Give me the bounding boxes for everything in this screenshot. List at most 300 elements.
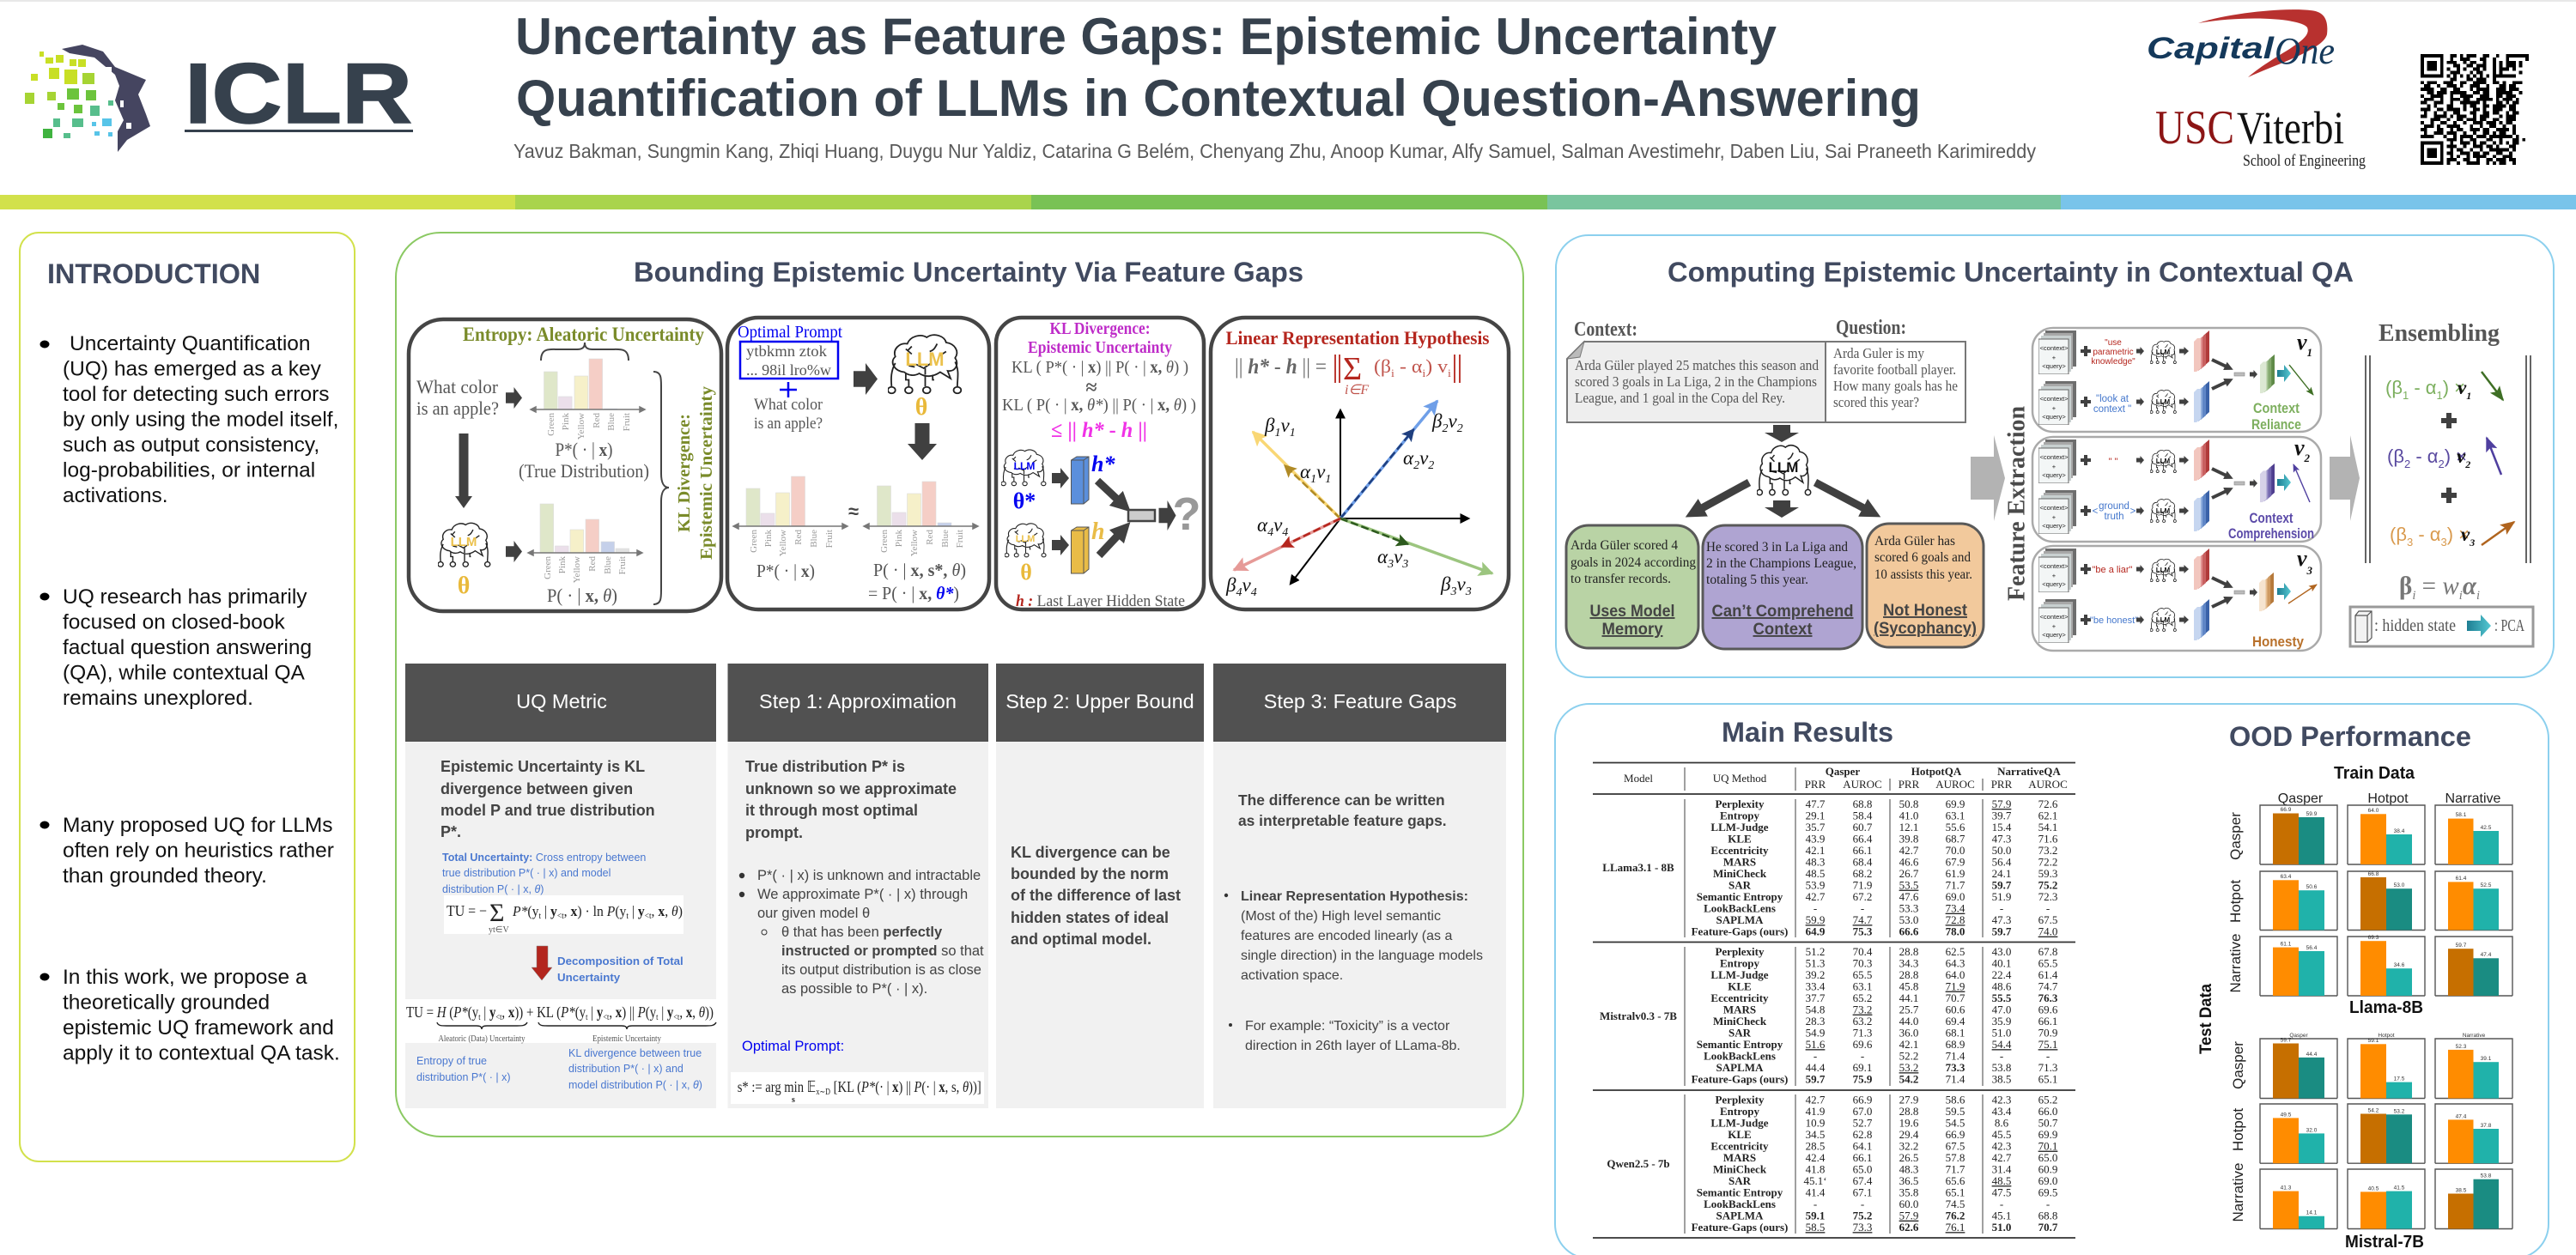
table section: LLama3.1: 35.7: [1806, 821, 1826, 834]
decomposition note: [557, 955, 683, 984]
table section: Qwen: 36.5: [1899, 1174, 1918, 1187]
table section: LLama3.1: KLE: [1728, 833, 1752, 846]
formula: KL: [1002, 358, 1196, 415]
table section: Mistral: 35.9: [1992, 1015, 2011, 1028]
table section: Mistral: SAR: [1728, 1027, 1752, 1040]
formulas: [756, 560, 966, 603]
bar chart: model distribution: Pink: [557, 556, 568, 573]
vector: [2288, 585, 2317, 603]
plus signs: [2081, 564, 2091, 625]
logo: USC Viterbi: Viterbi: [2237, 102, 2344, 154]
question box: favorite football player.: [1833, 361, 1956, 378]
diagram box: entropy and KL divergence: [409, 319, 721, 611]
table section: Qwen: 67.1: [1853, 1186, 1872, 1199]
label: Llama-8B: Llama-8B: [2349, 998, 2423, 1017]
table section: Mistral: 71.3: [2038, 1061, 2057, 1074]
prompt stack 1: <query>: [2042, 580, 2066, 588]
vector labels: v: [1242, 574, 1251, 596]
outcome: uses model memory: to transfer records.: [1571, 572, 1671, 586]
instruction: ground truth: >: [2130, 506, 2136, 517]
table section: Mistral: 71.4: [1946, 1050, 1965, 1063]
bullet 2: (QA), while contextual QA: [63, 661, 306, 685]
formula: total uncertainty: <t: [645, 912, 652, 921]
table section: LLama3.1: SAR: [1728, 879, 1752, 892]
note: entropy: Entropy of true: [416, 1055, 487, 1067]
optimal prompt label: Optimal Prompt:: [742, 1039, 844, 1054]
bar chart: P star: Red: [793, 530, 804, 545]
table header: NarrativeQA: [1997, 765, 2061, 778]
row arrows and brains: LLM: [2156, 616, 2171, 624]
label: v3: 3: [2306, 564, 2313, 577]
bullet: example: direction in 26th layer of LLama-8b.: [1245, 1039, 1461, 1053]
instruction: look at context: "look at: [2096, 394, 2129, 404]
table section: Mistral: 69.6: [1853, 1038, 1873, 1051]
vector labels: β: [1432, 410, 1442, 432]
table section: Mistral: 74.7: [2038, 980, 2058, 993]
column: step 1: [728, 664, 988, 1108]
table section: LLama3.1: 58.4: [1853, 809, 1873, 822]
statement: model P and true distribution: [440, 802, 655, 819]
column labels: mistral: [2289, 1033, 2486, 1039]
total uncertainty note: [442, 852, 646, 895]
question: is an apple?: [416, 397, 499, 419]
prompt stack 2: +: [2052, 622, 2057, 630]
bar chart: model distribution: Red: [587, 556, 598, 572]
vector 4: [1234, 518, 1340, 570]
bar chart: true distribution: Pink: [561, 413, 571, 430]
prompt box: [740, 342, 838, 379]
bar charts: Llama-8B grid: [2260, 805, 2512, 996]
term 2: - α: [2410, 446, 2439, 467]
instruction: ground truth: ground: [2099, 501, 2129, 512]
table section: Qwen: 42.4: [1806, 1151, 1826, 1164]
table section: Mistral: 44.4: [1806, 1061, 1826, 1074]
chart: qasper/hotpot: 64.0: [2368, 808, 2379, 814]
label: test data: Test Data: [2197, 984, 2215, 1054]
label: v1: 1: [2307, 346, 2312, 359]
arrow: [1052, 535, 1069, 555]
formula: decomposition: |: [587, 1003, 597, 1021]
difference arrows: [2212, 578, 2257, 607]
chart: hotpot/qasper: [2260, 1104, 2337, 1163]
formula: decomposition: t: [478, 1013, 481, 1022]
table section: Qwen: 28.8: [1899, 1105, 1918, 1118]
outcome: uses model memory: Arda Güler scored 4: [1571, 538, 1678, 553]
bullet 1: activations.: [63, 484, 168, 507]
block: h star: [1072, 457, 1089, 504]
arrow: PCA: [2277, 474, 2291, 491]
table section: Mistral: KLE: [1728, 980, 1752, 993]
label: Linear Representation Hypothesis: [1226, 327, 1490, 349]
formula: ) v: [1425, 355, 1448, 377]
chart: narrative/narrative: [2435, 937, 2512, 996]
arrow: into LLM: [1765, 425, 1799, 442]
outcome: not honest: Arda Güler has: [1874, 534, 1955, 549]
formula: i: [1391, 367, 1394, 379]
arrow: [1052, 468, 1069, 488]
label: v3: v: [2297, 546, 2307, 571]
term 3: 3: [2407, 536, 2413, 549]
table section: Mistral: 76.3: [2038, 991, 2058, 1004]
formula: true distribution: (True Distribution): [519, 460, 649, 482]
total uncertainty note: true distribution P*( · | x) and model: [442, 867, 611, 879]
chart: qasper/narrative: [2435, 805, 2512, 864]
table section: Mistral: Semantic Entropy: [1697, 1038, 1783, 1051]
title: Quantification of LLMs in Contextual Question-Answering: [516, 70, 1921, 127]
feature frame 3: honesty: [2032, 546, 2321, 651]
statement: it through most optimal: [745, 802, 918, 819]
outcome: uses model memory: Memory: [1602, 621, 1663, 639]
heading: bounding: Bounding Epistemic Uncertainty Via Feature Gaps: [634, 257, 1303, 288]
question box: Arda Guler is my: [1833, 345, 1924, 361]
inequality: ≤ || h* - h ||: [1051, 419, 1147, 442]
table: main results: [1593, 762, 2075, 1238]
prompt stack 2: <context>: [2040, 504, 2069, 512]
formula: total uncertainty: yt∈V: [489, 925, 509, 935]
prompt stack 1: [2038, 330, 2076, 374]
theta star: θ*: [1013, 488, 1036, 513]
bullet: example: [1229, 1019, 1461, 1053]
bar chart: prompted: Red: [925, 530, 935, 545]
prompt stack 1: <query>: [2042, 471, 2066, 479]
table section: Mistral: 68.9: [1946, 1038, 1965, 1051]
note: KL divergence: distribution P*( · | x) and: [568, 1063, 683, 1075]
instruction: look at context: [2093, 394, 2131, 415]
table section: Qwen: MiniCheck: [1713, 1163, 1767, 1176]
arrows to difference: [1097, 481, 1125, 555]
table section: Qwen: Eccentricity: [1710, 1140, 1769, 1153]
table section: LLama3.1: 68.8: [1853, 797, 1872, 810]
icon: head silhouette with pixels: [25, 45, 150, 152]
logo: USC Viterbi: [2155, 101, 2366, 170]
chart: qasper/narrative: 39.1: [2481, 1056, 2492, 1062]
term 1: 1: [2466, 390, 2471, 402]
chart: qasper/hotpot: 38.4: [2394, 828, 2405, 834]
row arrows and brains: LLM: [2156, 507, 2171, 515]
table section: Mistral: 59.7: [1806, 1073, 1826, 1086]
chart: hotpot/narrative: 37.8: [2481, 1123, 2492, 1129]
row labels: mistral: Hotpot: [2230, 1108, 2246, 1151]
formula: true distribution: P*( · | x): [555, 439, 613, 460]
row labels: llama: Qasper: [2227, 812, 2244, 860]
vector labels: β: [1226, 574, 1236, 596]
diagram box: KL bound: [996, 318, 1204, 610]
chart: qasper/narrative: 52.3: [2456, 1044, 2467, 1050]
prompt stack 1: +: [2052, 572, 2057, 579]
formula: total uncertainty: [444, 895, 683, 935]
bullet 3: often rely on heuristics rather: [63, 840, 334, 862]
QR code: [2421, 56, 2529, 163]
bullet: linear representation: activation space.: [1241, 968, 1343, 983]
statement: Epistemic Uncertainty is KL: [440, 758, 645, 775]
vector labels: 2: [1413, 459, 1419, 472]
formula: Σ: [1343, 351, 1362, 387]
arrow: [506, 541, 522, 562]
term 2: 2: [2464, 458, 2470, 470]
formula: beta: i: [2476, 589, 2480, 603]
theta: θ: [915, 394, 927, 421]
instruction: use parametric knowledge: [2091, 338, 2136, 367]
bullet: linear representation: (Most of the) High level semantic: [1241, 909, 1441, 924]
table section: LLama3.1: 53.5: [1899, 879, 1918, 892]
table section: LLama3.1: 74.0: [2038, 925, 2057, 938]
instruction: ground truth: truth: [2104, 512, 2124, 522]
difference box: [1128, 510, 1155, 521]
table section: LLama3.1: 75.2: [2038, 879, 2057, 892]
table section: Qwen: 41.4: [1806, 1186, 1826, 1199]
table section: Qwen: 41.9: [1806, 1105, 1825, 1118]
vector labels: v: [1448, 410, 1457, 432]
table section: Mistral: 51.6: [1806, 1038, 1826, 1051]
table section: Qwen: Entropy: [1720, 1105, 1759, 1118]
label: optimal prompt: Optimal Prompt: [738, 323, 842, 342]
column header: Step 3: Feature Gaps: [1264, 690, 1456, 712]
table section: LLama3.1: Eccentricity: [1710, 844, 1769, 857]
table section: LLama3.1: 29.1: [1806, 809, 1825, 822]
term 3: - α: [2413, 524, 2441, 545]
table section: LLama3.1: 50.8: [1899, 797, 1918, 810]
bar chart: model distribution: Yellow: [572, 556, 582, 583]
table section: Qwen: 67.4: [1853, 1174, 1873, 1187]
statement: bounded by the norm: [1011, 865, 1169, 882]
table section: Qwen: 50.7: [2038, 1116, 2058, 1130]
table section: Qwen: 67.5: [1946, 1140, 1965, 1153]
chart: narrative/narrative: 47.4: [2481, 952, 2492, 958]
row labels: llama: [2227, 812, 2244, 992]
question box: [1826, 342, 1965, 422]
table header: PRR: [1805, 778, 1826, 791]
table section: Mistral: 48.6: [1992, 980, 2012, 993]
difference arrows: [2212, 469, 2257, 498]
chart: narrative/hotpot: 40.5: [2368, 1186, 2379, 1191]
question box: How many goals has he: [1833, 378, 1958, 394]
chart: hotpot/hotpot: 66.8: [2368, 871, 2379, 877]
statement: divergence between given: [440, 780, 633, 797]
formulas: P*( · | x): [756, 561, 815, 581]
question: [754, 396, 823, 433]
table section: Qwen: 65.2: [2038, 1094, 2057, 1106]
term 1: v: [2458, 377, 2466, 398]
table header: PRR: [1899, 778, 1920, 791]
table section: Qwen: SAPLMA: [1716, 1210, 1764, 1222]
vector: [2293, 464, 2310, 502]
column labels: mistral: Narrative: [2463, 1033, 2486, 1039]
table section: Mistral: Feature-Gaps (ours): [1692, 1073, 1788, 1086]
table section: Mistral: 65.5: [1853, 968, 1872, 981]
table section: LLama3.1: 53.9: [1806, 879, 1825, 892]
table section: Mistral: 64.3: [1946, 956, 1965, 970]
bullet 1: by only using the model itself,: [63, 409, 338, 431]
table section: Qwen: 28.5: [1806, 1140, 1825, 1153]
chart: narrative/qasper: [2260, 937, 2337, 996]
outcome: not honest: Not Honest: [1883, 602, 1968, 620]
table section: Mistral: 70.4: [1853, 945, 1873, 958]
outcome: uses model memory: Uses Model: [1590, 603, 1674, 621]
table section: LLama3.1: 72.6: [2038, 797, 2058, 810]
caption: h : Last Layer Hidden State: [1016, 592, 1185, 610]
table section: LLama3.1: 46.6: [1899, 856, 1919, 869]
table section: LLama3.1: 78.0: [1946, 925, 1965, 938]
table section: Mistral: 51.0: [1992, 1027, 2011, 1040]
formula: beta: i: [2412, 589, 2415, 603]
bullet list: θ that has been perfectly: [781, 925, 943, 940]
chart: narrative/hotpot: [2348, 1169, 2425, 1229]
bullet 2: [39, 585, 312, 710]
bullet: example: For example: “Toxicity” is a vector: [1245, 1019, 1450, 1034]
bar chart: model distribution: [528, 504, 642, 583]
feature frame 2: context comprehension: [2032, 435, 2321, 542]
table section: LLama3.1: 67.5: [2038, 913, 2057, 926]
table section: Qwen: 65.0: [1853, 1163, 1872, 1176]
heading: introduction: INTRODUCTION: [47, 258, 260, 289]
formula: decomposition: y: [489, 1003, 495, 1021]
term 1: (β: [2385, 377, 2403, 398]
table header: PRR: [1991, 778, 2013, 791]
bar chart: true distribution: [531, 359, 645, 440]
label: KL divergence: KL Divergence:: [1049, 319, 1151, 338]
chart: narrative/qasper: [2260, 1169, 2337, 1229]
prompt stack 2: <query>: [2042, 631, 2066, 639]
chart: hotpot/qasper: 50.6: [2306, 884, 2318, 890]
table section: LLama3.1: 69.9: [1946, 797, 1965, 810]
formula: [1235, 351, 1460, 397]
table section: Mistral: 28.3: [1806, 1015, 1825, 1028]
row arrows and brains: LLM: [2156, 398, 2171, 406]
table section: Qwen: 68.8: [2038, 1210, 2057, 1222]
difference arrows: [2212, 360, 2257, 389]
table section: LLama3.1: 59.7: [1992, 879, 2012, 892]
formula: decomposition: x, θ)): [686, 1003, 715, 1021]
table section: LLama3.1: 68.2: [1853, 867, 1872, 880]
chart: qasper/qasper: 44.4: [2306, 1052, 2318, 1058]
formula: - α: [1394, 355, 1423, 377]
arrow: to ensembling: [2330, 435, 2360, 521]
formula: optimal prompt: [KL (: [830, 1078, 861, 1096]
table header: [1624, 765, 2068, 791]
table section: Qwen: 19.6: [1899, 1116, 1919, 1130]
prompt box: ytbkmn ztok: [746, 343, 827, 360]
vector labels: 2: [1442, 422, 1448, 435]
icon: LLM brain: LLM: [1769, 459, 1798, 476]
table section: LLama3.1: LLama3.1 - 8B: [1602, 861, 1674, 874]
term 1: 1: [2403, 389, 2409, 402]
term 1: [2385, 372, 2503, 402]
column: step 3: [1213, 664, 1506, 1108]
bullet 2: remains unexplored.: [63, 687, 253, 710]
bullet 1: log-probabilities, or internal: [63, 458, 315, 482]
table section: Mistral: -: [1861, 1050, 1864, 1063]
icon: LLM brain: [1757, 446, 1811, 495]
heading: main results: Main Results: [1722, 717, 1893, 748]
table section: LLama3.1: 61.9: [1946, 867, 1965, 880]
formula: total uncertainty: x, θ): [658, 903, 683, 919]
table section: Qwen: -: [1861, 1197, 1864, 1210]
norm bars: [2366, 355, 2530, 563]
vector labels: 1: [1274, 427, 1280, 440]
table section: Qwen: 45.1‘: [1803, 1174, 1827, 1187]
chart: narrative/qasper: 61.1: [2281, 941, 2292, 948]
statement: [440, 758, 655, 840]
question: is an apple?: [754, 415, 823, 433]
arrow: decomposition: [532, 946, 552, 980]
formula: true distribution: [519, 439, 649, 482]
table section: Mistral: 39.2: [1806, 968, 1825, 981]
chart: vector axes: [1225, 401, 1492, 599]
vector labels: α: [1257, 514, 1267, 536]
table section: Mistral: -: [1814, 1050, 1817, 1063]
formula: KL: KL ( P( · | x, θ*) || P( · | x, θ) ): [1002, 396, 1196, 415]
bullet: linear representation: [1224, 889, 1483, 983]
table section: Mistral: 63.2: [1853, 1015, 1872, 1028]
table section: Qwen: LookBackLens: [1704, 1197, 1776, 1210]
table section: Qwen: 58.6: [1946, 1094, 1965, 1106]
label: v1: v: [2297, 330, 2307, 355]
row arrows and brains: [2136, 341, 2189, 414]
term 3: 3: [2440, 536, 2447, 549]
statement: [1011, 844, 1181, 948]
formula: total uncertainty: <t: [557, 912, 564, 921]
table header: Model: [1624, 772, 1653, 785]
chart: hotpot/hotpot: [2348, 1104, 2425, 1163]
table section: Mistral: 54.2: [1899, 1073, 1918, 1086]
formula: optimal prompt: x∼D: [816, 1088, 830, 1097]
outcome: can't comprehend context: Context: [1753, 621, 1813, 639]
vector labels: α: [1403, 447, 1413, 469]
label: context comprehension: Context: [2250, 510, 2293, 526]
table section: Qwen: 32.2: [1899, 1140, 1918, 1153]
statement: KL divergence can be: [1011, 844, 1170, 861]
table section: LLama3.1: 55.6: [1946, 821, 1965, 834]
legend: [2350, 607, 2533, 646]
vector labels: 4: [1251, 586, 1257, 599]
table section: LLama3.1: 72.2: [2038, 856, 2057, 869]
label: context reliance: Context: [2253, 400, 2300, 416]
formula: decomposition: ,: [609, 1003, 616, 1021]
prompt stack 2: [2038, 381, 2076, 425]
bullet 4: epistemic UQ framework and: [63, 1016, 334, 1040]
statement: [1238, 791, 1447, 829]
bar chart: prompted: Pink: [894, 530, 904, 547]
vector 2: [1340, 401, 1437, 518]
table section: Qwen: 42.7: [1992, 1151, 2012, 1164]
table section: Qwen: 67.0: [1853, 1105, 1872, 1118]
panel: results: [1555, 704, 2549, 1255]
table section: Qwen: 64.1: [1853, 1140, 1872, 1153]
table header: Qasper: [1826, 765, 1860, 778]
label: KL divergence: KL Divergence:: [675, 414, 694, 532]
table section: Qwen: 71.7: [1946, 1163, 1965, 1176]
theta: θ: [458, 573, 470, 599]
table section: LLama3.1: 66.6: [1899, 925, 1919, 938]
formula: decomposition: [405, 999, 716, 1044]
bar chart: true distribution: Red: [592, 413, 602, 428]
formula: decomposition: |: [481, 1003, 489, 1021]
table section: Mistral: 64.0: [1946, 968, 1965, 981]
arrow: PCA: [2277, 583, 2291, 600]
table section: Mistral: 53.2: [1899, 1061, 1918, 1074]
table section: Mistral: 60.6: [1946, 1003, 1965, 1016]
table section: LLama3.1: LookBackLens: [1704, 902, 1776, 915]
table section: Qwen: KLE: [1728, 1128, 1752, 1141]
bullet list: P*( · | x) is unknown and intractable: [757, 868, 981, 883]
statement: of the difference of last: [1011, 887, 1181, 904]
label: context reliance: Reliance: [2251, 416, 2301, 433]
plus: [780, 382, 797, 397]
table section: Qwen: 60.0: [1899, 1197, 1918, 1210]
table section: Qwen: 66.9: [1853, 1094, 1872, 1106]
table section: Mistral: 54.9: [1806, 1027, 1825, 1040]
prompt stack 1: [2038, 440, 2076, 483]
